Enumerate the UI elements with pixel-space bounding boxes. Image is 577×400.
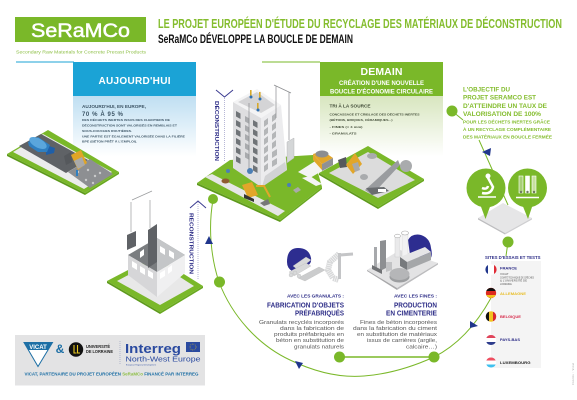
icon: blue truck xyxy=(27,135,55,155)
text block: fines: PRODUCTION xyxy=(394,302,437,310)
text block: fines: en substitution de matériaux xyxy=(357,332,438,338)
icon: crusher conveyor xyxy=(365,160,412,195)
text block: granulats: produits préfabriqués en xyxy=(274,332,344,338)
credit: Crédits : Vicat xyxy=(572,363,575,385)
logo: Université de Lorraine: UNIVERSITÉ xyxy=(86,344,110,349)
logos panel xyxy=(15,335,205,386)
panel: demain: CRÉATION D'UNE NOUVELLE xyxy=(339,79,424,87)
text block: objectif: VALORISATION DE 100% xyxy=(463,111,541,118)
label: deconstruction xyxy=(213,90,233,162)
illustration: lab pins xyxy=(466,168,547,234)
title: SeRaMCo DÉVELOPPE LA BOUCLE DE DEMAIN xyxy=(158,31,353,46)
panel: demain: (BÉTONS, BRIQUES, CÉRAMIQUES...) xyxy=(330,117,392,122)
icon: yellow dumper xyxy=(64,150,87,176)
panel: aujourd'hui: AUJOURD'HUI xyxy=(98,76,171,87)
illustration: precast products xyxy=(287,248,353,281)
logo: Interreg: Interreg xyxy=(125,341,181,356)
sites panel: SITES D'ESSAIS ET TESTS xyxy=(485,255,541,261)
flag: France xyxy=(485,264,534,286)
flag: Belgique: BELGIQUE xyxy=(500,315,521,319)
loop nodes xyxy=(208,106,514,362)
text block: objectif xyxy=(463,86,552,140)
text block: objectif: POUR LES DÉCHETS INERTES GRÂCE xyxy=(463,118,550,124)
text block: fines xyxy=(353,294,438,350)
panel: aujourd'hui: BPE (BÉTON PRÊT À L'EMPLOI). xyxy=(82,139,137,144)
text block: granulats xyxy=(259,294,345,350)
text block: granulats: granulats naturels xyxy=(294,344,345,350)
text block: granulats: AVEC LES GRANULATS : xyxy=(287,294,345,298)
flag: France: LORRAINE xyxy=(500,283,512,286)
text block: fines: EN CIMENTERIE xyxy=(386,310,437,318)
illustration: deconstruction site xyxy=(197,85,332,222)
logo: Vicat xyxy=(24,342,52,366)
text block: objectif: L'OBJECTIF DU xyxy=(463,86,510,94)
logo: Interreg: North-West Europe xyxy=(126,354,200,364)
logo: Interreg xyxy=(125,341,200,366)
text block: objectif: PROJET SERAMCO EST xyxy=(463,94,536,102)
text block: granulats: béton en substitution de xyxy=(276,338,344,344)
logo: SeRaMCo: Secondary Raw Materials for Concrete Precast Products xyxy=(16,50,147,54)
text block: fines: calcaire…) xyxy=(406,344,437,350)
panel: demain: CONCASSAGE ET CRIBLAGE DES DÉCHETS INERTES xyxy=(330,112,420,116)
logo: SeRaMCo: SeRaMCo xyxy=(31,21,130,42)
loop arrowheads xyxy=(205,148,491,369)
label: reconstruction: RECONSTRUCTION xyxy=(188,213,194,274)
panel: demain: TRI À LA SOURCE xyxy=(330,104,371,108)
icon: test tubes pin xyxy=(508,168,547,219)
label: reconstruction xyxy=(188,201,206,279)
logo: Interreg: European Regional Development xyxy=(126,364,156,366)
panel: demain: DEMAIN xyxy=(360,66,402,78)
text block: granulats: Granulats recyclés incorporés xyxy=(259,320,345,326)
green land xyxy=(197,155,332,222)
label: deconstruction: DÉCONSTRUCTION xyxy=(213,101,221,161)
caption: VICAT, PARTENAIRE DU PROJET EUROPÉEN SeRaMCo FINANCÉ PAR INTERREG xyxy=(24,372,199,377)
text block: granulats: PRÉFABRIQUÉS xyxy=(295,308,344,318)
building xyxy=(233,85,294,187)
text block: fines: Fines de béton incorporées xyxy=(360,320,438,326)
illustration: road platform with trucks xyxy=(7,130,119,195)
icon: dump truck xyxy=(338,153,362,174)
text block: granulats: FABRICATION D'OBJETS xyxy=(267,302,344,310)
panel: aujourd'hui: SOUS-COUCHES ROUTIÈRES. xyxy=(82,128,132,133)
logo: Université de Lorraine: DE LORRAINE xyxy=(86,349,113,354)
logo: SeRaMCo xyxy=(15,17,147,54)
logo: Université de Lorraine xyxy=(69,342,113,357)
panel: aujourd'hui: UNE PARTIE EST ÉGALEMENT VALORISÉE DANS LA FILIÈRE xyxy=(82,133,185,138)
title xyxy=(158,16,562,46)
panel: demain: - GRANULATS xyxy=(330,132,356,136)
panel: aujourd'hui: 70 % À 95 % xyxy=(82,111,124,118)
illustration: loaded truck on green strip xyxy=(313,150,333,171)
illustration: sorting and crushing platform xyxy=(319,146,424,209)
flag: Allemagne: ALLEMAGNE xyxy=(500,292,527,296)
text block: granulats: dans la fabrication de xyxy=(280,326,344,332)
flag: Luxembourg: LUXEMBOURG xyxy=(500,361,531,365)
panel: demain xyxy=(262,62,443,156)
icon: microscope pin xyxy=(466,168,506,219)
sites panel xyxy=(485,255,541,368)
text block: fines: dans la fabrication du ciment xyxy=(353,326,438,332)
flag: France: VICAT xyxy=(500,272,509,276)
ampersand: & xyxy=(56,342,65,356)
panel: aujourd'hui: DES DÉCHETS INERTES ISSUS DES CHANTIERS DE xyxy=(82,117,170,122)
icon: spiral stair xyxy=(328,253,353,280)
panel: demain: - FINES (< 4 mm) xyxy=(330,125,362,129)
arrow: circular loop xyxy=(211,111,508,376)
text block: fines: AVEC LES FINES : xyxy=(394,294,438,298)
flag: Pays-Bas: PAYS-BAS xyxy=(500,338,520,342)
text block: objectif: DES MATÉRIAUX EN BOUCLE FERMÉE xyxy=(463,132,552,140)
flag: France: & L'UNIVERSITÉ DE xyxy=(500,280,528,282)
panel: aujourd'hui: DÉCONSTRUCTION SONT VALORISÉS EN REMBLAIS ET xyxy=(82,123,177,128)
text block: objectif: D'ATTEINDRE UN TAUX DE xyxy=(463,103,548,110)
illustration: cement plant xyxy=(367,231,438,290)
illustration: reconstruction building xyxy=(107,191,203,314)
panel: aujourd'hui: AUJOURD'HUI, EN EUROPE, xyxy=(82,104,146,109)
logo: Vicat: VICAT xyxy=(29,345,47,351)
panel: aujourd'hui xyxy=(16,62,196,156)
flag: France: COMITÉ TECHNIQUE DE CRÉCHES xyxy=(500,276,534,280)
text block: fines: issus de carrières (argile, xyxy=(367,338,437,344)
icon: excavator xyxy=(242,182,270,206)
panel: demain: BOUCLE D'ÉCONOMIE CIRCULAIRE xyxy=(330,88,433,96)
text block: objectif: À UN RECYCLAGE COMPLÉMENTAIRE xyxy=(463,125,551,132)
flag: France: FRANCE xyxy=(500,266,517,270)
